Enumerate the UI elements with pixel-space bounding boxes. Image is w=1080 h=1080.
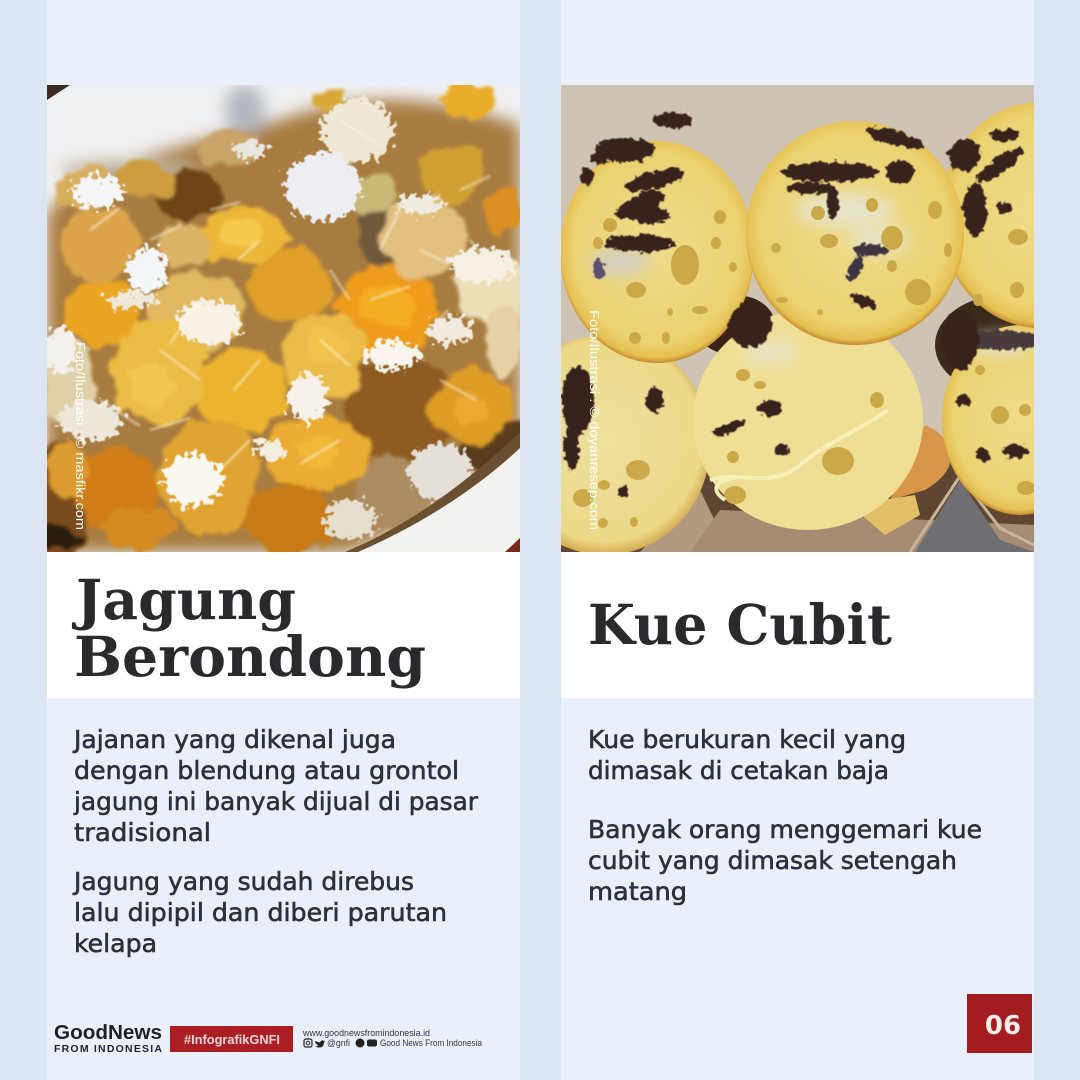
title band xyxy=(561,552,1034,698)
description: Kue Cubit: dimasak di cetakan baja xyxy=(588,756,889,785)
description: Jagung Berondong: dengan blendung atau grontol xyxy=(74,756,459,785)
description: Jagung Berondong: tradisional xyxy=(74,818,211,847)
upper middle kue xyxy=(746,121,964,345)
title: Jagung Berondong: Berondong xyxy=(74,624,426,689)
description: Kue Cubit: Banyak orang menggemari kue xyxy=(588,815,982,844)
chocolate sprinkles xyxy=(562,112,1040,498)
logo: GoodNews From Indonesia: FROM INDONESIA xyxy=(54,1043,162,1055)
photo credit: Foto/Ilustrasi : © doyanresep.com xyxy=(587,310,602,530)
panel: Jagung Berondong xyxy=(30,0,540,1080)
photo credit: Foto/Ilustrasi : © masfikr.com xyxy=(73,342,88,530)
lower right kue xyxy=(942,325,1034,515)
footer xyxy=(54,1022,482,1055)
bowl rim lower right xyxy=(355,445,520,552)
description: Jagung Berondong: Jajanan yang dikenal juga xyxy=(72,725,396,754)
photo: jagung berondong xyxy=(30,82,540,560)
description: Jagung Berondong: jagung ini banyak dijual di pasar xyxy=(73,787,479,816)
upper right kue xyxy=(947,102,1034,328)
description: Jagung Berondong xyxy=(72,725,479,958)
description: Kue Cubit: cubit yang dimasak setengah xyxy=(588,846,957,875)
title: Kue Cubit: Kue Cubit xyxy=(588,592,893,657)
title: Jagung Berondong: Jagung xyxy=(71,567,296,632)
hashtag badge xyxy=(170,1026,293,1052)
panel: Kue Cubit xyxy=(561,0,1034,1080)
contact links xyxy=(302,1028,482,1048)
contact links: @gnfi xyxy=(327,1038,350,1048)
page number: 06 xyxy=(985,1011,1021,1041)
lower middle kue xyxy=(693,310,951,535)
holes in the kue xyxy=(573,198,1035,528)
glaze highlights xyxy=(590,194,1030,362)
title band xyxy=(47,552,520,698)
upper left kue xyxy=(560,141,754,363)
contact links: www.goodnewsfromindonesia.id xyxy=(302,1028,430,1038)
description: Kue Cubit xyxy=(588,725,982,906)
corn kernels xyxy=(30,82,540,560)
glaze lines xyxy=(710,410,888,500)
description: Jagung Berondong: kelapa xyxy=(74,929,157,958)
logo: GoodNews From Indonesia: GoodNews xyxy=(54,1022,162,1044)
logo: GoodNews From Indonesia xyxy=(54,1022,162,1055)
lower left kue xyxy=(561,336,707,552)
hashtag badge: #InfografikGNFI xyxy=(184,1033,280,1047)
page number xyxy=(967,994,1032,1053)
description: Kue Cubit: matang xyxy=(588,877,687,906)
contact links: Good News From Indonesia xyxy=(380,1038,482,1048)
description: Kue Cubit: Kue berukuran kecil yang xyxy=(588,725,906,754)
description: Jagung Berondong: Jagung yang sudah direbus xyxy=(72,867,414,896)
title: Jagung Berondong xyxy=(71,567,426,689)
shredded coconut xyxy=(44,98,516,540)
description: Jagung Berondong: lalu dipipil dan diberi parutan xyxy=(74,898,447,927)
photo: kue cubit xyxy=(561,85,1034,552)
